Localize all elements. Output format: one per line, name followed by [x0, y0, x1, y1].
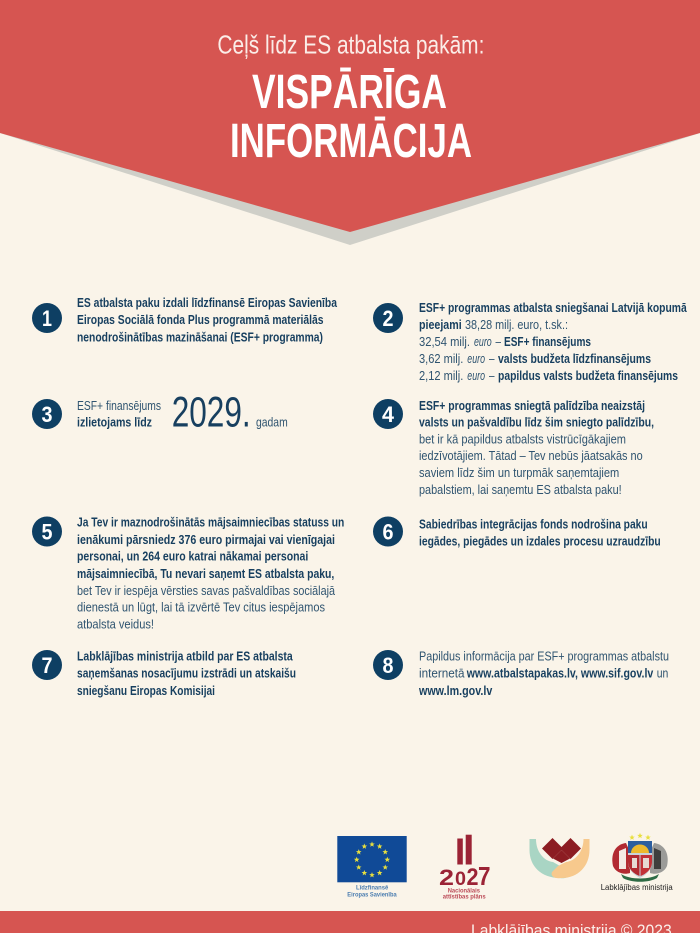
header banner — [0, 0, 700, 245]
number badge 7: 7 — [42, 653, 52, 678]
logo: Ministry of Welfare coat of arms — [601, 833, 673, 892]
item 5 — [32, 515, 344, 631]
logo: National Development Plan 2027: attīstības plāns — [443, 895, 486, 901]
text block 8: www.lm.gov.lv — [418, 683, 493, 698]
text block 2: ESF+ finansējums — [504, 334, 591, 349]
text block 5: atbalsta veidus! — [77, 616, 154, 631]
logo: National Development Plan 2027: 2 — [439, 865, 454, 890]
text block 2: pieejami — [419, 317, 462, 332]
text block 2: 38,28 milj. euro, t.sk.: — [465, 317, 568, 332]
text block 6 — [419, 516, 661, 549]
number badge 1 — [32, 303, 62, 333]
text block 4: bet ir kā papildus atbalsts vistrūcīgākajiem — [419, 431, 626, 446]
text block 2: euro — [474, 334, 492, 349]
number badge 8 — [373, 650, 403, 680]
text block 5: bet Tev ir iespēja vērsties savas pašvaldības sociālajā — [77, 583, 336, 598]
number badge 6: 6 — [382, 520, 394, 544]
text block 3: gadam — [256, 415, 288, 430]
number badge 3: 3 — [42, 402, 52, 427]
text block 5 — [77, 515, 344, 631]
number badge 7 — [32, 650, 62, 680]
text block 1: Eiropas Sociālā fonda Plus programmā materiālās — [77, 312, 324, 327]
logo: EU co-funding: Eiropas Savienība — [347, 892, 397, 899]
text block 3: 2029. — [172, 389, 251, 437]
text block 2: valsts budžeta līdzfinansējums — [498, 351, 651, 366]
number badge 6 — [373, 516, 403, 546]
number badge 5 — [32, 516, 62, 546]
text block 2: 32,54 milj. — [419, 334, 470, 349]
text block 6: Sabiedrības integrācijas fonds nodrošina paku — [419, 516, 648, 531]
text block 5: mājsaimniecībā, Tu nevari saņemt ES atbalsta paku, — [77, 566, 334, 581]
text block 5: personai, un 264 euro katrai nākamai personai — [77, 549, 308, 564]
logo: National Development Plan 2027: 2 — [466, 864, 478, 891]
logo: EU co-funding: Līdzfinansē — [356, 884, 389, 891]
text block 3: ESF+ finansējums — [77, 398, 161, 413]
item 1 — [32, 295, 338, 345]
logo: EU co-funding — [337, 836, 407, 899]
title — [217, 30, 484, 168]
title: Ceļš līdz ES atbalsta pakām: — [217, 30, 484, 60]
item 7 — [32, 649, 296, 698]
text block 2: 2,12 milj. — [419, 368, 463, 383]
number badge 2 — [373, 303, 403, 333]
text block 7 — [77, 649, 296, 698]
text block 2: – — [489, 351, 495, 366]
text block 8: www.atbalstapakas.lv, www.sif.gov.lv — [466, 666, 654, 681]
number badge 8: 8 — [382, 653, 394, 678]
logo: National Development Plan 2027: Nacionālais — [448, 888, 481, 894]
number badge 3 — [32, 399, 62, 429]
title: INFORMĀCIJA — [230, 115, 472, 168]
text block 4 — [419, 398, 654, 497]
logo: National Development Plan 2027: 0 — [455, 869, 466, 890]
text block 5: ienākumi pārsniedz 376 euro pirmajai vai vienīgajai — [77, 532, 335, 547]
logo: hands and food packages — [530, 838, 590, 878]
logo: National Development Plan 2027 — [439, 835, 490, 901]
text block 1: nenodrošinātības mazināšanai (ESF+ programma) — [77, 330, 323, 345]
text block 8: un — [657, 666, 668, 681]
text block 2: euro — [467, 368, 485, 383]
text block 2: – — [489, 368, 495, 383]
text block 3: izlietojams līdz — [77, 415, 152, 430]
number badge 1: 1 — [42, 306, 52, 331]
number badge 4: 4 — [382, 402, 395, 427]
text block 4: saviem līdz šim un turpmāk saņemtajiem — [419, 465, 619, 480]
item 8 — [373, 649, 669, 698]
text block 4: iedzīvotājiem. Tātad – Tev nebūs jāatsakās no — [419, 448, 643, 463]
text block 8: internetā — [419, 666, 465, 681]
text block 2: euro — [467, 351, 485, 366]
text block 1: ES atbalsta paku izdali līdzfinansē Eiropas Savienība — [77, 295, 338, 310]
footer bar — [0, 911, 700, 933]
logo: Ministry of Welfare coat of arms: Labklājības ministrija — [601, 883, 673, 892]
text block 4: pabalstiem, lai saņemtu ES atbalsta paku! — [419, 482, 622, 497]
text block 5: Ja Tev ir maznodrošinātās mājsaimniecības statuss un — [77, 515, 344, 530]
text block 2: – — [496, 334, 502, 349]
item 2 — [373, 300, 687, 383]
text block 2: 3,62 milj. — [419, 351, 463, 366]
item 6 — [373, 516, 661, 549]
item 4 — [373, 398, 654, 497]
number badge 2: 2 — [382, 306, 394, 331]
text block 2 — [419, 300, 687, 383]
text block 4: ESF+ programmas sniegtā palīdzība neaizstāj — [419, 398, 645, 413]
text block 5: dienestā un lūgt, lai tā izvērtē Tev citus iespējamos — [77, 600, 325, 615]
text block 8 — [418, 649, 669, 698]
title: VISPĀRĪGA — [252, 66, 447, 119]
text block 7: sniegšanu Eiropas Komisijai — [77, 683, 215, 698]
item 3 — [32, 389, 288, 437]
logo: National Development Plan 2027: 7 — [478, 861, 490, 891]
number badge 4 — [373, 399, 403, 429]
text block 7: Labklājības ministrija atbild par ES atbalsta — [77, 649, 293, 664]
text block 7: saņemšanas nosacījumu izstrādi un atskaišu — [77, 666, 296, 681]
text block 1 — [77, 295, 338, 345]
number badge 5: 5 — [42, 520, 52, 544]
text block 3 — [77, 389, 288, 437]
